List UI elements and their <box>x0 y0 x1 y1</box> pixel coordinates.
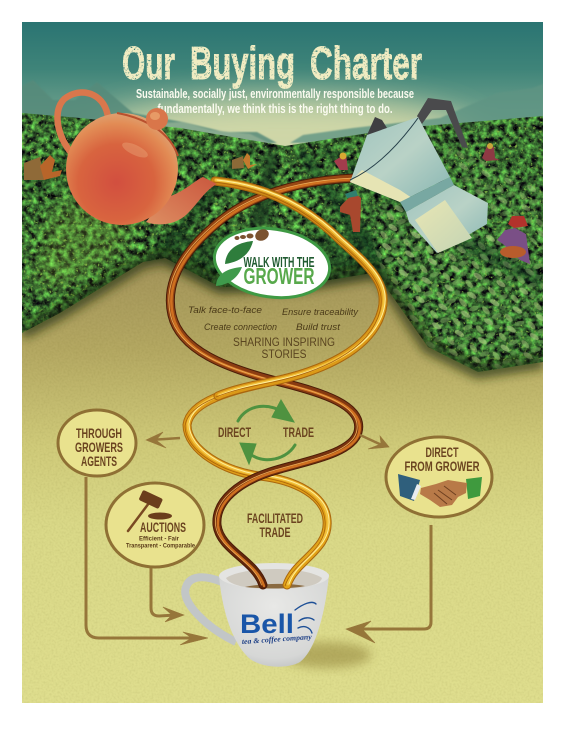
background: soil ground <box>22 250 543 703</box>
panel: through growers agents <box>58 410 136 476</box>
panel: auctions: Transparent - Comparable <box>126 542 195 550</box>
icon: coffee beans <box>234 227 271 243</box>
arrow: direct trade to direct from grower <box>360 435 389 449</box>
ribbon: gold tea strand lower <box>185 180 385 586</box>
title: Charter <box>310 37 422 89</box>
panel: auctions: AUCTIONS <box>140 519 186 535</box>
panel: direct from grower: DIRECT <box>426 444 459 460</box>
text: walk with the grower values: Build trust <box>296 322 341 332</box>
subtitle: Sustainable, socially just, environmentally responsible because <box>136 87 414 101</box>
direct trade labels and cycle arrows: TRADE <box>283 424 314 440</box>
background: sky <box>22 22 543 146</box>
title <box>122 37 422 89</box>
ribbon: gold tea strand upper crossing <box>213 180 385 397</box>
title: Our <box>122 37 175 89</box>
panel: auctions <box>106 483 204 567</box>
panel: auctions: Efficient - Fair <box>139 536 179 542</box>
label: facilitated trade: FACILITATED <box>247 510 303 526</box>
text: walk with the grower values: SHARING INSPIRING <box>233 337 335 349</box>
background: plantation hedges <box>22 113 543 372</box>
subtitle <box>136 87 414 116</box>
panel: through growers agents: AGENTS <box>81 453 117 469</box>
arrow: auctions to cup <box>151 568 184 622</box>
subtitle: fundamentally, we think this is the right thing to do. <box>158 102 392 116</box>
background: paper grain <box>22 320 543 703</box>
icon: gavel <box>128 490 172 531</box>
cup logo: Bell tea and coffee company <box>240 602 316 646</box>
title: Buying <box>190 37 295 89</box>
panel: direct from grower: FROM GROWER <box>404 458 480 474</box>
text: walk with the grower values: Talk face-to-face <box>188 305 262 315</box>
logo text <box>244 254 315 289</box>
label: facilitated trade <box>247 510 303 540</box>
logo text: GROWER <box>244 263 315 289</box>
text: walk with the grower values <box>188 305 359 361</box>
workers picking in the field <box>24 143 530 264</box>
ribbon: brown coffee strand <box>169 178 360 586</box>
coffee and tea ribbons forming a double helix <box>169 178 385 586</box>
panel: direct from grower <box>386 437 492 517</box>
text: walk with the grower values: Ensure traceability <box>282 307 359 317</box>
background: distant mountains <box>22 85 542 144</box>
cup logo: Bell tea and coffee company: tea & coffee company <box>242 632 313 646</box>
panel: through growers agents: GROWERS <box>75 439 123 455</box>
icon: green leaves <box>216 241 253 286</box>
text: walk with the grower values: Create connection <box>204 322 277 332</box>
arrow: direct trade to through growers agents <box>146 432 180 448</box>
label: facilitated trade: TRADE <box>260 524 290 540</box>
icon: handshake <box>398 474 482 507</box>
text: walk with the grower values: STORIES <box>262 349 307 361</box>
icon: teapot <box>57 93 217 225</box>
logo text: WALK WITH THE <box>244 254 314 271</box>
icon: coffee cup body <box>185 563 371 668</box>
icon: moka pot <box>350 98 488 253</box>
arrow: direct from grower to cup <box>346 525 431 643</box>
direct trade labels and cycle arrows: DIRECT <box>218 424 251 440</box>
arrow: through growers agents to cup <box>86 477 208 645</box>
direct trade labels and cycle arrows <box>218 400 314 464</box>
panel: through growers agents: THROUGH <box>76 425 122 441</box>
cup logo: Bell tea and coffee company: Bell <box>240 609 294 639</box>
icon: green cycle arrows <box>238 400 295 464</box>
logo: Walk with the Grower <box>210 221 334 305</box>
